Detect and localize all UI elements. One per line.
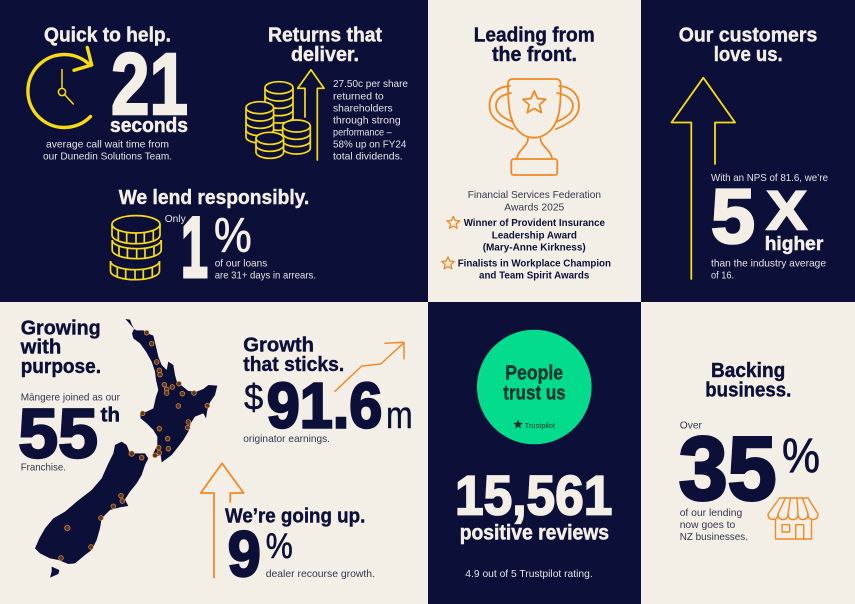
text: finalists award bbox=[458, 257, 611, 281]
heading: leading from the front bbox=[474, 24, 595, 66]
text: winner award bbox=[464, 217, 605, 253]
stat: 35 percent: 35 bbox=[679, 420, 776, 520]
heading: backing business: business. bbox=[705, 379, 791, 401]
stat: 5x bbox=[711, 174, 807, 260]
arrow: growth line bbox=[335, 342, 404, 391]
stat: 9 percent: 9 bbox=[228, 518, 261, 590]
arrow: yellow up bbox=[672, 78, 735, 279]
badge: trustpilot circle: trust us bbox=[503, 382, 566, 404]
icon: star winner bbox=[447, 216, 460, 228]
text: dividends bbox=[333, 78, 408, 162]
badge: trustpilot circle bbox=[477, 330, 592, 444]
text: arrears: of our loans bbox=[215, 258, 267, 270]
panel: leading from the front bbox=[428, 0, 641, 302]
panel: growth and map bbox=[0, 302, 428, 604]
text: lending: NZ businesses. bbox=[680, 531, 748, 543]
icon: coin stacks with arrow bbox=[246, 70, 324, 160]
text: lending: now goes to bbox=[680, 519, 735, 531]
stat: 35 percent: % bbox=[782, 430, 820, 483]
stat: 91.6m: m bbox=[386, 395, 413, 437]
stat: 91.6m: 91.6 bbox=[267, 370, 382, 442]
stat: 5x: 5 bbox=[711, 174, 755, 260]
heading: growing with purpose: purpose. bbox=[21, 356, 101, 378]
stat: 9 percent bbox=[228, 518, 293, 590]
text: franchise: Franchise. bbox=[21, 462, 66, 474]
heading: leading from the front: Leading from bbox=[474, 24, 595, 46]
text: originator earnings: originator earnings. bbox=[243, 433, 330, 445]
text: mangere: Māngere joined as our bbox=[21, 391, 120, 403]
heading: our customers love us: love us. bbox=[714, 44, 783, 66]
map markers bbox=[59, 330, 210, 560]
stat: 9 percent: % bbox=[266, 527, 293, 566]
heading: we're going up: We’re going up. bbox=[225, 506, 365, 528]
stat: 21: 21 bbox=[111, 36, 188, 133]
text: finalists award: Finalists in Workplace Champion bbox=[458, 257, 611, 269]
heading: returns that deliver bbox=[268, 24, 382, 66]
heading: returns that deliver: Returns that bbox=[268, 24, 382, 46]
heading: backing business: Backing bbox=[711, 360, 785, 382]
heading: backing business bbox=[705, 360, 791, 401]
text: over: Over bbox=[680, 419, 702, 431]
panel: people trust us bbox=[428, 302, 641, 604]
text: only: Only bbox=[165, 213, 186, 225]
badge: trustpilot circle: Trustpilot bbox=[525, 423, 555, 430]
text: arrears bbox=[215, 258, 316, 282]
text: industry average bbox=[711, 258, 826, 282]
icon: trophy bbox=[490, 79, 579, 175]
text: dividends: returned to bbox=[333, 90, 384, 102]
text: winner award: (Mary-Anne Kirkness) bbox=[483, 241, 586, 253]
icon: clock with arrow bbox=[28, 48, 92, 128]
text: winner award: Winner of Provident Insurance bbox=[464, 217, 605, 229]
arrow: orange up bbox=[201, 463, 244, 578]
stat: 1 percent bbox=[181, 200, 252, 296]
heading: growing with purpose: with bbox=[20, 337, 61, 359]
text: industry average: than the industry average bbox=[711, 258, 826, 270]
text: awards intro: Awards 2025 bbox=[504, 201, 564, 213]
panel: backing business bbox=[641, 302, 855, 604]
heading: returns that deliver: deliver. bbox=[291, 44, 359, 66]
heading: we lend responsibly: We lend responsibly. bbox=[119, 187, 309, 209]
stat: 55th: th bbox=[101, 404, 120, 426]
icon: coin pile bbox=[110, 216, 161, 280]
text: call wait time bbox=[43, 138, 172, 162]
text: lending: of our lending bbox=[680, 507, 742, 519]
stat: 1 percent: % bbox=[214, 210, 252, 262]
text: dividends: performance – bbox=[333, 126, 392, 138]
label: higher: higher bbox=[765, 233, 824, 255]
icon: star finalists bbox=[442, 257, 454, 269]
text: winner award: Leadership Award bbox=[492, 229, 577, 241]
text: dividends: total dividends. bbox=[333, 150, 403, 162]
heading: growth that sticks: that sticks. bbox=[243, 354, 344, 376]
text: nps: With an NPS of 81.6, we’re bbox=[711, 172, 828, 184]
text: dividends: 27.50c per share bbox=[333, 78, 408, 90]
heading: growth that sticks bbox=[243, 334, 344, 376]
text: industry average: of 16. bbox=[711, 270, 734, 282]
heading: our customers love us bbox=[679, 24, 817, 66]
stat: 91.6m: $ bbox=[244, 376, 263, 417]
heading: growth that sticks: Growth bbox=[243, 334, 314, 356]
heading: our customers love us: Our customers bbox=[679, 24, 817, 46]
icon: shop bbox=[768, 498, 818, 539]
stat: 5x: X bbox=[766, 178, 807, 241]
text: dividends: through strong bbox=[333, 114, 401, 126]
panel: quick to help, returns, lending bbox=[0, 0, 428, 302]
badge: trustpilot circle: People bbox=[505, 362, 563, 384]
stat: 15,561: 15,561 bbox=[455, 464, 612, 526]
text: call wait time: average call wait time from bbox=[46, 138, 169, 150]
text: dividends: 58% up on FY24 bbox=[333, 138, 406, 150]
text: awards intro: Financial Services Federation bbox=[468, 189, 601, 201]
text: rating: 4.9 out of 5 Trustpilot rating. bbox=[465, 568, 593, 580]
stat: 1 percent: 1 bbox=[181, 200, 208, 296]
text: awards intro bbox=[468, 189, 601, 213]
label: positive reviews: positive reviews bbox=[460, 521, 609, 544]
heading: growing with purpose bbox=[20, 318, 101, 378]
map: New Zealand bbox=[35, 319, 217, 578]
text: lending bbox=[680, 507, 748, 543]
label: seconds: seconds bbox=[110, 115, 188, 137]
heading: leading from the front: the front. bbox=[492, 44, 577, 66]
heading: quick to help: Quick to help. bbox=[44, 24, 171, 46]
heading: growing with purpose: Growing bbox=[21, 318, 101, 340]
text: finalists award: and Team Spirit Awards bbox=[479, 269, 589, 281]
text: call wait time: our Dunedin Solutions Team. bbox=[43, 150, 172, 162]
text: arrears: are 31+ days in arrears. bbox=[215, 270, 316, 282]
panel: our customers love us bbox=[641, 0, 855, 302]
stat: 55th: 55 bbox=[18, 394, 98, 472]
text: dividends: shareholders bbox=[333, 102, 393, 114]
text: dealer recourse: dealer recourse growth. bbox=[266, 568, 375, 580]
